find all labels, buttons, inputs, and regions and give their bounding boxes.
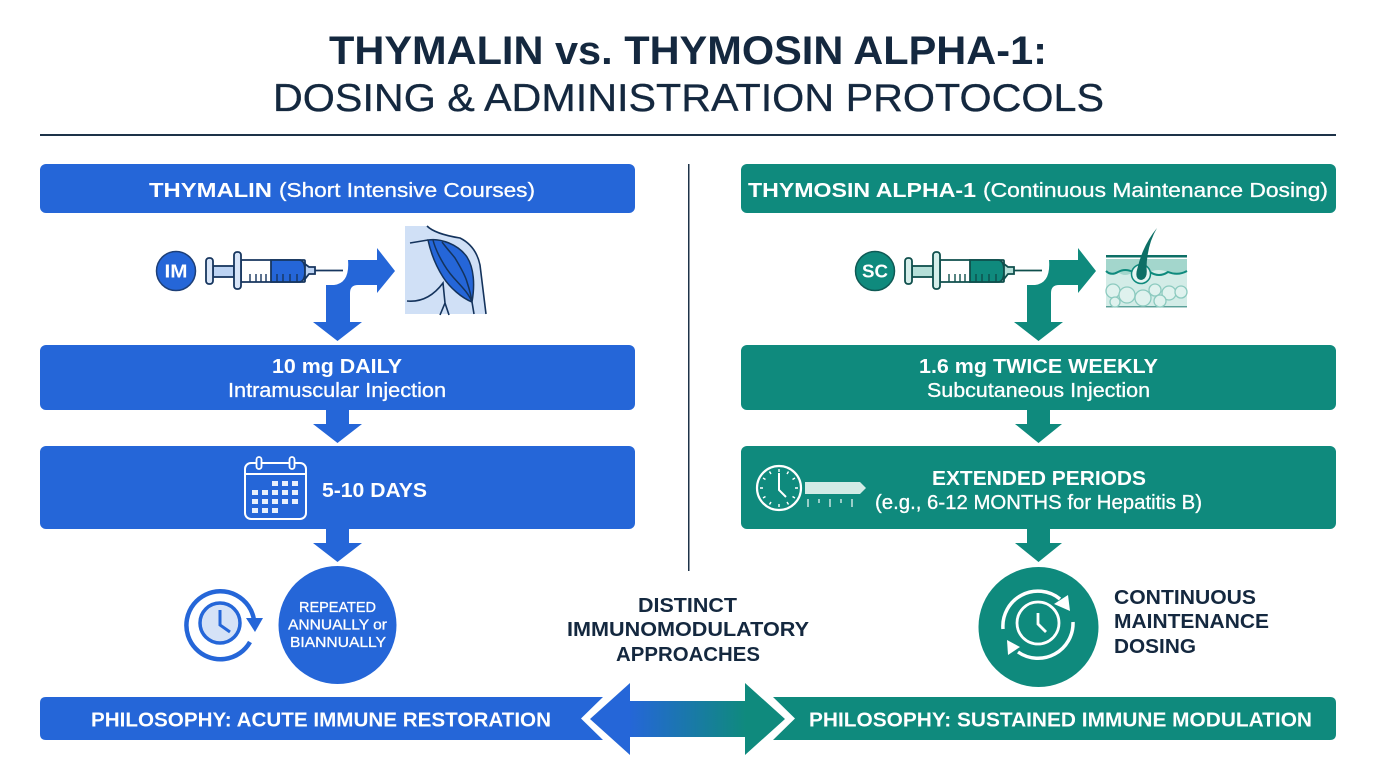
title	[273, 29, 1104, 120]
duration box: Thymosin Alpha-1: EXTENDED PERIODS	[932, 468, 1146, 490]
panel: Thymosin Alpha-1	[741, 164, 1336, 740]
repetition circle	[278, 566, 396, 684]
heading: Thymosin Alpha-1: THYMOSIN ALPHA-1	[748, 180, 976, 202]
duration box: Thymalin	[40, 446, 635, 529]
dose box: Thymalin	[40, 345, 635, 410]
title: THYMALIN vs. THYMOSIN ALPHA-1:	[329, 29, 1047, 73]
arrow: double-headed comparison	[590, 683, 785, 755]
center label: distinct approaches: APPROACHES	[616, 644, 760, 666]
icon: syringe	[905, 252, 1042, 289]
arrow: duration to repetition	[313, 529, 362, 562]
title: DOSING & ADMINISTRATION PROTOCOLS	[273, 77, 1104, 120]
heading: Thymalin: THYMALIN	[149, 180, 272, 202]
icon: syringe	[206, 252, 343, 289]
icon: continuous cycle circle	[978, 567, 1098, 687]
icon: clock with timeline	[757, 466, 866, 510]
arrow: dose to duration	[313, 410, 362, 443]
repetition circle: REPEATED	[299, 599, 376, 616]
repetition circle: ANNUALLY or	[288, 616, 387, 634]
arrow: forked route	[1014, 248, 1096, 341]
arrow: forked route	[313, 248, 395, 341]
arrow: dose to duration	[1015, 410, 1062, 443]
icon: skin layers	[1106, 228, 1187, 308]
dose box: Thymalin: Intramuscular Injection	[228, 380, 446, 402]
heading: Thymalin: (Short Intensive Courses)	[279, 180, 535, 202]
icon: IM badge: IM	[164, 262, 188, 282]
philosophy bar: Thymosin Alpha-1	[773, 697, 1336, 740]
icon: SC badge	[856, 252, 894, 290]
dose box: Thymalin: 10 mg DAILY	[272, 356, 403, 378]
label: continuous maintenance dosing: CONTINUOUS	[1114, 587, 1256, 609]
philosophy bar: Thymalin	[40, 697, 603, 740]
center label: distinct approaches	[567, 595, 810, 666]
icon: calendar	[245, 457, 306, 519]
center label: distinct approaches: IMMUNOMODULATORY	[567, 619, 810, 641]
repetition circle: BIANNUALLY	[290, 634, 386, 651]
heading: Thymosin Alpha-1	[741, 164, 1336, 213]
arrow: duration to maintenance	[1015, 529, 1062, 562]
icon: repeating clock	[186, 591, 263, 659]
duration box: Thymalin: 5-10 DAYS	[322, 480, 427, 502]
label: continuous maintenance dosing: DOSING	[1114, 636, 1196, 658]
label: continuous maintenance dosing: MAINTENANCE	[1114, 611, 1269, 633]
center label: distinct approaches: DISTINCT	[638, 595, 737, 617]
philosophy bar: Thymosin Alpha-1: PHILOSOPHY: SUSTAINED IMMUNE MODULATION	[809, 710, 1312, 732]
icon: shoulder muscle	[405, 226, 486, 315]
heading: Thymalin	[40, 164, 635, 213]
philosophy bar: Thymalin: PHILOSOPHY: ACUTE IMMUNE RESTORATION	[91, 710, 551, 732]
icon: SC badge: SC	[862, 262, 888, 282]
icon: IM badge	[156, 252, 196, 290]
heading: Thymosin Alpha-1: (Continuous Maintenance Dosing)	[983, 180, 1328, 202]
panel: Thymalin	[40, 164, 635, 740]
duration box: Thymosin Alpha-1: (e.g., 6-12 MONTHS for Hepatitis B)	[875, 492, 1202, 514]
duration box: Thymosin Alpha-1	[741, 446, 1336, 529]
dose box: Thymosin Alpha-1: 1.6 mg TWICE WEEKLY	[919, 356, 1159, 378]
label: continuous maintenance dosing	[1114, 587, 1269, 658]
dose box: Thymosin Alpha-1	[741, 345, 1336, 410]
dose box: Thymosin Alpha-1: Subcutaneous Injection	[927, 380, 1150, 402]
